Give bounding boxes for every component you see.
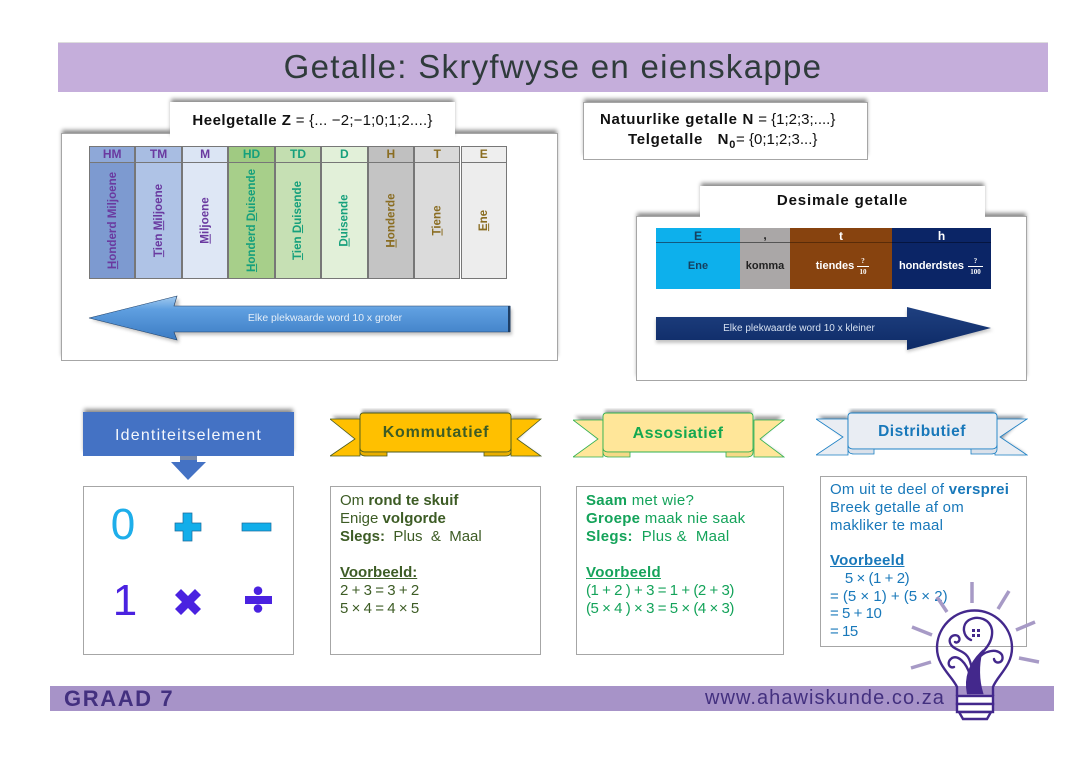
grade label: GRAAD 7: [64, 686, 174, 711]
column H: Honderde: [384, 193, 397, 248]
panel: distributief text: [820, 476, 1027, 647]
icon: minus: [242, 523, 271, 531]
column TD: Tien Duisende: [291, 181, 304, 260]
title banner: Getalle: Skryfwyse en eienskappe: [284, 48, 822, 85]
operator icons: [174, 512, 272, 615]
column T: Tiene: [431, 205, 444, 236]
column tiendes: [790, 228, 892, 289]
panel: assosiatief text: Groepe maak nie saak: [586, 510, 745, 527]
icon: plus: [175, 513, 201, 541]
panel: assosiatief text: [576, 486, 784, 655]
panel: distributief text: = 5 + 10: [830, 605, 881, 622]
icon: times: [175, 589, 201, 615]
column TM: [135, 146, 182, 279]
heading: heelgetalle: Heelgetalle Z = {... −2;−1;0;1;2....}: [192, 112, 433, 129]
bulb outline: [937, 610, 1012, 696]
ribbon: assosiatief: [573, 408, 785, 458]
ribbon: distributief: [816, 408, 1028, 456]
column honderdstes: h: [938, 229, 945, 243]
panel: assosiatief text: (5 × 4 ) × 3 = 5 × (4 × 3): [586, 600, 734, 617]
identiteitselement callout: [81, 406, 296, 480]
line: telgetalle: Telgetalle N0= {0;1;2;3...}: [628, 131, 817, 151]
column honderdstes: [892, 228, 991, 289]
panel: kommutatief text: Voorbeeld:: [340, 564, 417, 581]
column ene: E: [694, 229, 702, 243]
panel: distributief text: 5 × (1 + 2): [845, 570, 909, 587]
column E: Ene: [477, 210, 490, 231]
icon: divide: [245, 586, 272, 613]
panel: kommutatief text: Om rond te skuif: [340, 492, 458, 509]
ribbon: distributief: Distributief: [878, 423, 966, 440]
panel: natuurlike getalle: [583, 102, 868, 160]
column TD: [275, 146, 321, 279]
heading: heelgetalle: [170, 102, 455, 140]
panel: distributief text: makliker te maal: [830, 516, 943, 534]
column komma: [740, 228, 790, 289]
column honderdstes: honderdstes: [899, 260, 964, 272]
column TD: TD: [290, 147, 306, 161]
column T: T: [434, 147, 441, 161]
column H: H: [387, 147, 395, 161]
heading: desimale getalle: [700, 186, 985, 220]
column komma: komma: [746, 260, 784, 272]
column D: Duisende: [338, 194, 351, 247]
panel: assosiatief text: Saam met wie?: [586, 492, 694, 509]
one: 1: [113, 576, 137, 625]
panel: distributief text: Om uit te deel of versprei: [830, 481, 1009, 498]
column E: [461, 146, 507, 279]
column tiendes: t: [839, 229, 843, 243]
heading: identiteitselement: [83, 412, 294, 456]
panel: kommutatief text: 5 × 4 = 4 × 5: [340, 600, 419, 617]
column TM: Tien Miljoene: [152, 184, 165, 257]
column M: [182, 146, 228, 279]
column tiendes: tiendes: [816, 260, 854, 272]
column HM: [89, 146, 135, 279]
panel: distributief text: Voorbeeld: [830, 552, 904, 569]
column ene: [656, 228, 740, 289]
panel: kommutatief text: [330, 486, 541, 655]
panel: kommutatief text: Slegs: Plus & Maal: [340, 528, 482, 545]
column D: D: [340, 147, 349, 161]
arrow: 10x groter: Elke plekwaarde word 10 x groter: [248, 313, 403, 324]
arrow: 10x kleiner: [654, 307, 992, 353]
heading: desimale getalle: Desimale getalle: [777, 192, 908, 209]
column M: M: [200, 147, 210, 161]
panel: assosiatief text: Slegs: Plus & Maal: [586, 528, 730, 545]
column HM: Honderd Miljoene: [106, 172, 119, 269]
column T: [414, 146, 460, 279]
ribbon: assosiatief: Assosiatief: [633, 425, 724, 442]
heading: identiteitselement: Identiteitselement: [115, 427, 262, 444]
panel: kommutatief text: Enige volgorde: [340, 510, 446, 527]
ribbon: kommutatief: Kommutatief: [383, 424, 489, 441]
title banner: [58, 42, 1048, 92]
column tiendes: 10: [860, 268, 866, 276]
column tiendes: ?: [861, 257, 865, 265]
arrow: 10x kleiner: Elke plekwaarde word 10 x kleiner: [723, 323, 876, 334]
zero: 0: [111, 500, 135, 549]
panel: distributief text: Breek getalle af om: [830, 499, 964, 516]
panel: distributief text: = (5 × 1) + (5 × 2): [830, 588, 948, 604]
website: www.ahawiskunde.co.za: [705, 687, 945, 709]
panel: heelgetalle: [61, 133, 558, 361]
panel: assosiatief text: Voorbeeld: [586, 564, 661, 581]
ribbon: kommutatief: [330, 408, 542, 458]
bulb rays: [911, 582, 1039, 668]
column HM: HM: [103, 147, 122, 161]
column HD: Honderd Duisende: [245, 169, 258, 272]
tree swirl: [949, 618, 1003, 693]
panel: identity symbols: [83, 486, 294, 655]
column D: [321, 146, 368, 279]
icon: light bulb logo: [910, 582, 1040, 720]
column ene: Ene: [688, 260, 708, 272]
arrow: 10x groter: [88, 296, 514, 344]
column HD: HD: [243, 147, 260, 161]
column M: Miljoene: [199, 197, 212, 244]
footer bar: [50, 686, 1054, 711]
column H: [368, 146, 414, 279]
column TM: TM: [150, 147, 167, 161]
bulb base: [957, 696, 993, 719]
decimal table: [656, 228, 991, 289]
panel: assosiatief text: (1 + 2 ) + 3 = 1 + (2 + 3): [586, 582, 734, 599]
column E: E: [480, 147, 488, 161]
panel: kommutatief text: 2 + 3 = 3 + 2: [340, 582, 419, 599]
column HD: [228, 146, 275, 279]
column komma: ,: [763, 228, 767, 242]
panel: desimale getalle: [636, 216, 1027, 381]
line: natuurlike getalle: Natuurlike getalle N = {1;2;3;....}: [600, 111, 835, 128]
column honderdstes: 100: [970, 268, 981, 276]
column honderdstes: ?: [974, 257, 977, 265]
place value table: [89, 146, 507, 279]
panel: distributief text: = 15: [830, 623, 858, 640]
small house mark: [972, 629, 980, 637]
